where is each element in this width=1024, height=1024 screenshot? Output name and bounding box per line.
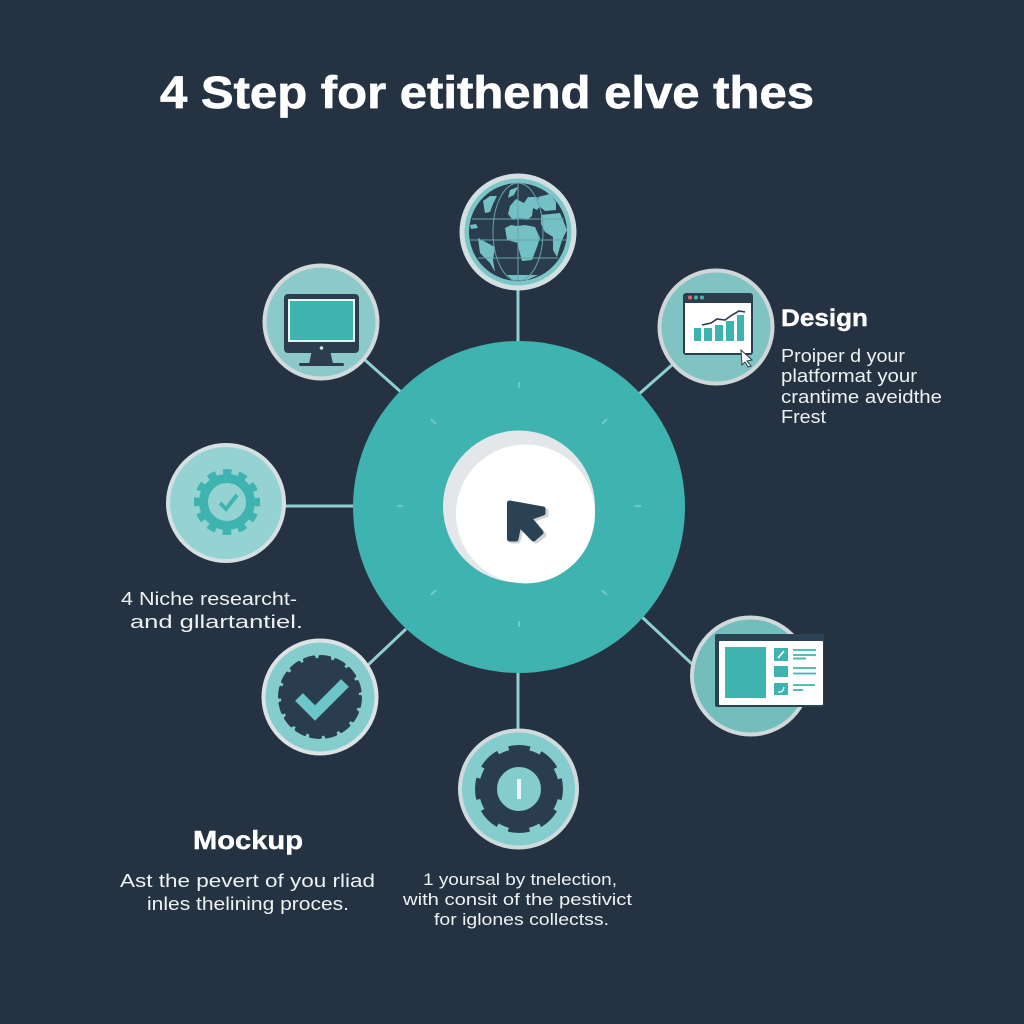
node: monitor bbox=[264, 266, 378, 378]
text: niche research: 4 Niche researcht- bbox=[121, 589, 297, 609]
text: design: platformat your bbox=[781, 366, 917, 386]
text: selection: 1 yoursal by tnelection, bbox=[423, 870, 617, 889]
node: design window bbox=[660, 270, 772, 384]
text: design bbox=[781, 305, 942, 427]
text: niche research: and gllartantiel. bbox=[130, 612, 303, 632]
text: selection: for iglones collectss. bbox=[434, 910, 609, 929]
text: mockup: Mockup bbox=[193, 825, 303, 855]
title: 4 Step for etithend elve thes bbox=[160, 67, 814, 118]
central hub bbox=[353, 341, 685, 673]
text: selection bbox=[402, 870, 632, 929]
icon: cursor arrow bbox=[510, 503, 546, 541]
text: design: Proiper d your bbox=[781, 346, 905, 366]
node: checklist card bbox=[692, 618, 824, 734]
text: mockup bbox=[120, 825, 375, 914]
text: niche research bbox=[121, 589, 303, 632]
text: design: Design bbox=[781, 305, 868, 332]
text: mockup: inles thelining proces. bbox=[147, 893, 349, 914]
text: mockup: Ast the pevert of you rliad bbox=[120, 870, 375, 891]
text: design: Frest bbox=[781, 407, 826, 427]
text: design: crantime aveidthe bbox=[781, 387, 942, 407]
node: gear with check bbox=[168, 445, 284, 561]
text: selection: with consit of the pestivict bbox=[402, 890, 632, 909]
node: gear bbox=[460, 730, 577, 848]
node: globe bbox=[462, 176, 574, 288]
node: check badge bbox=[264, 640, 376, 754]
connector lines bbox=[284, 288, 692, 731]
